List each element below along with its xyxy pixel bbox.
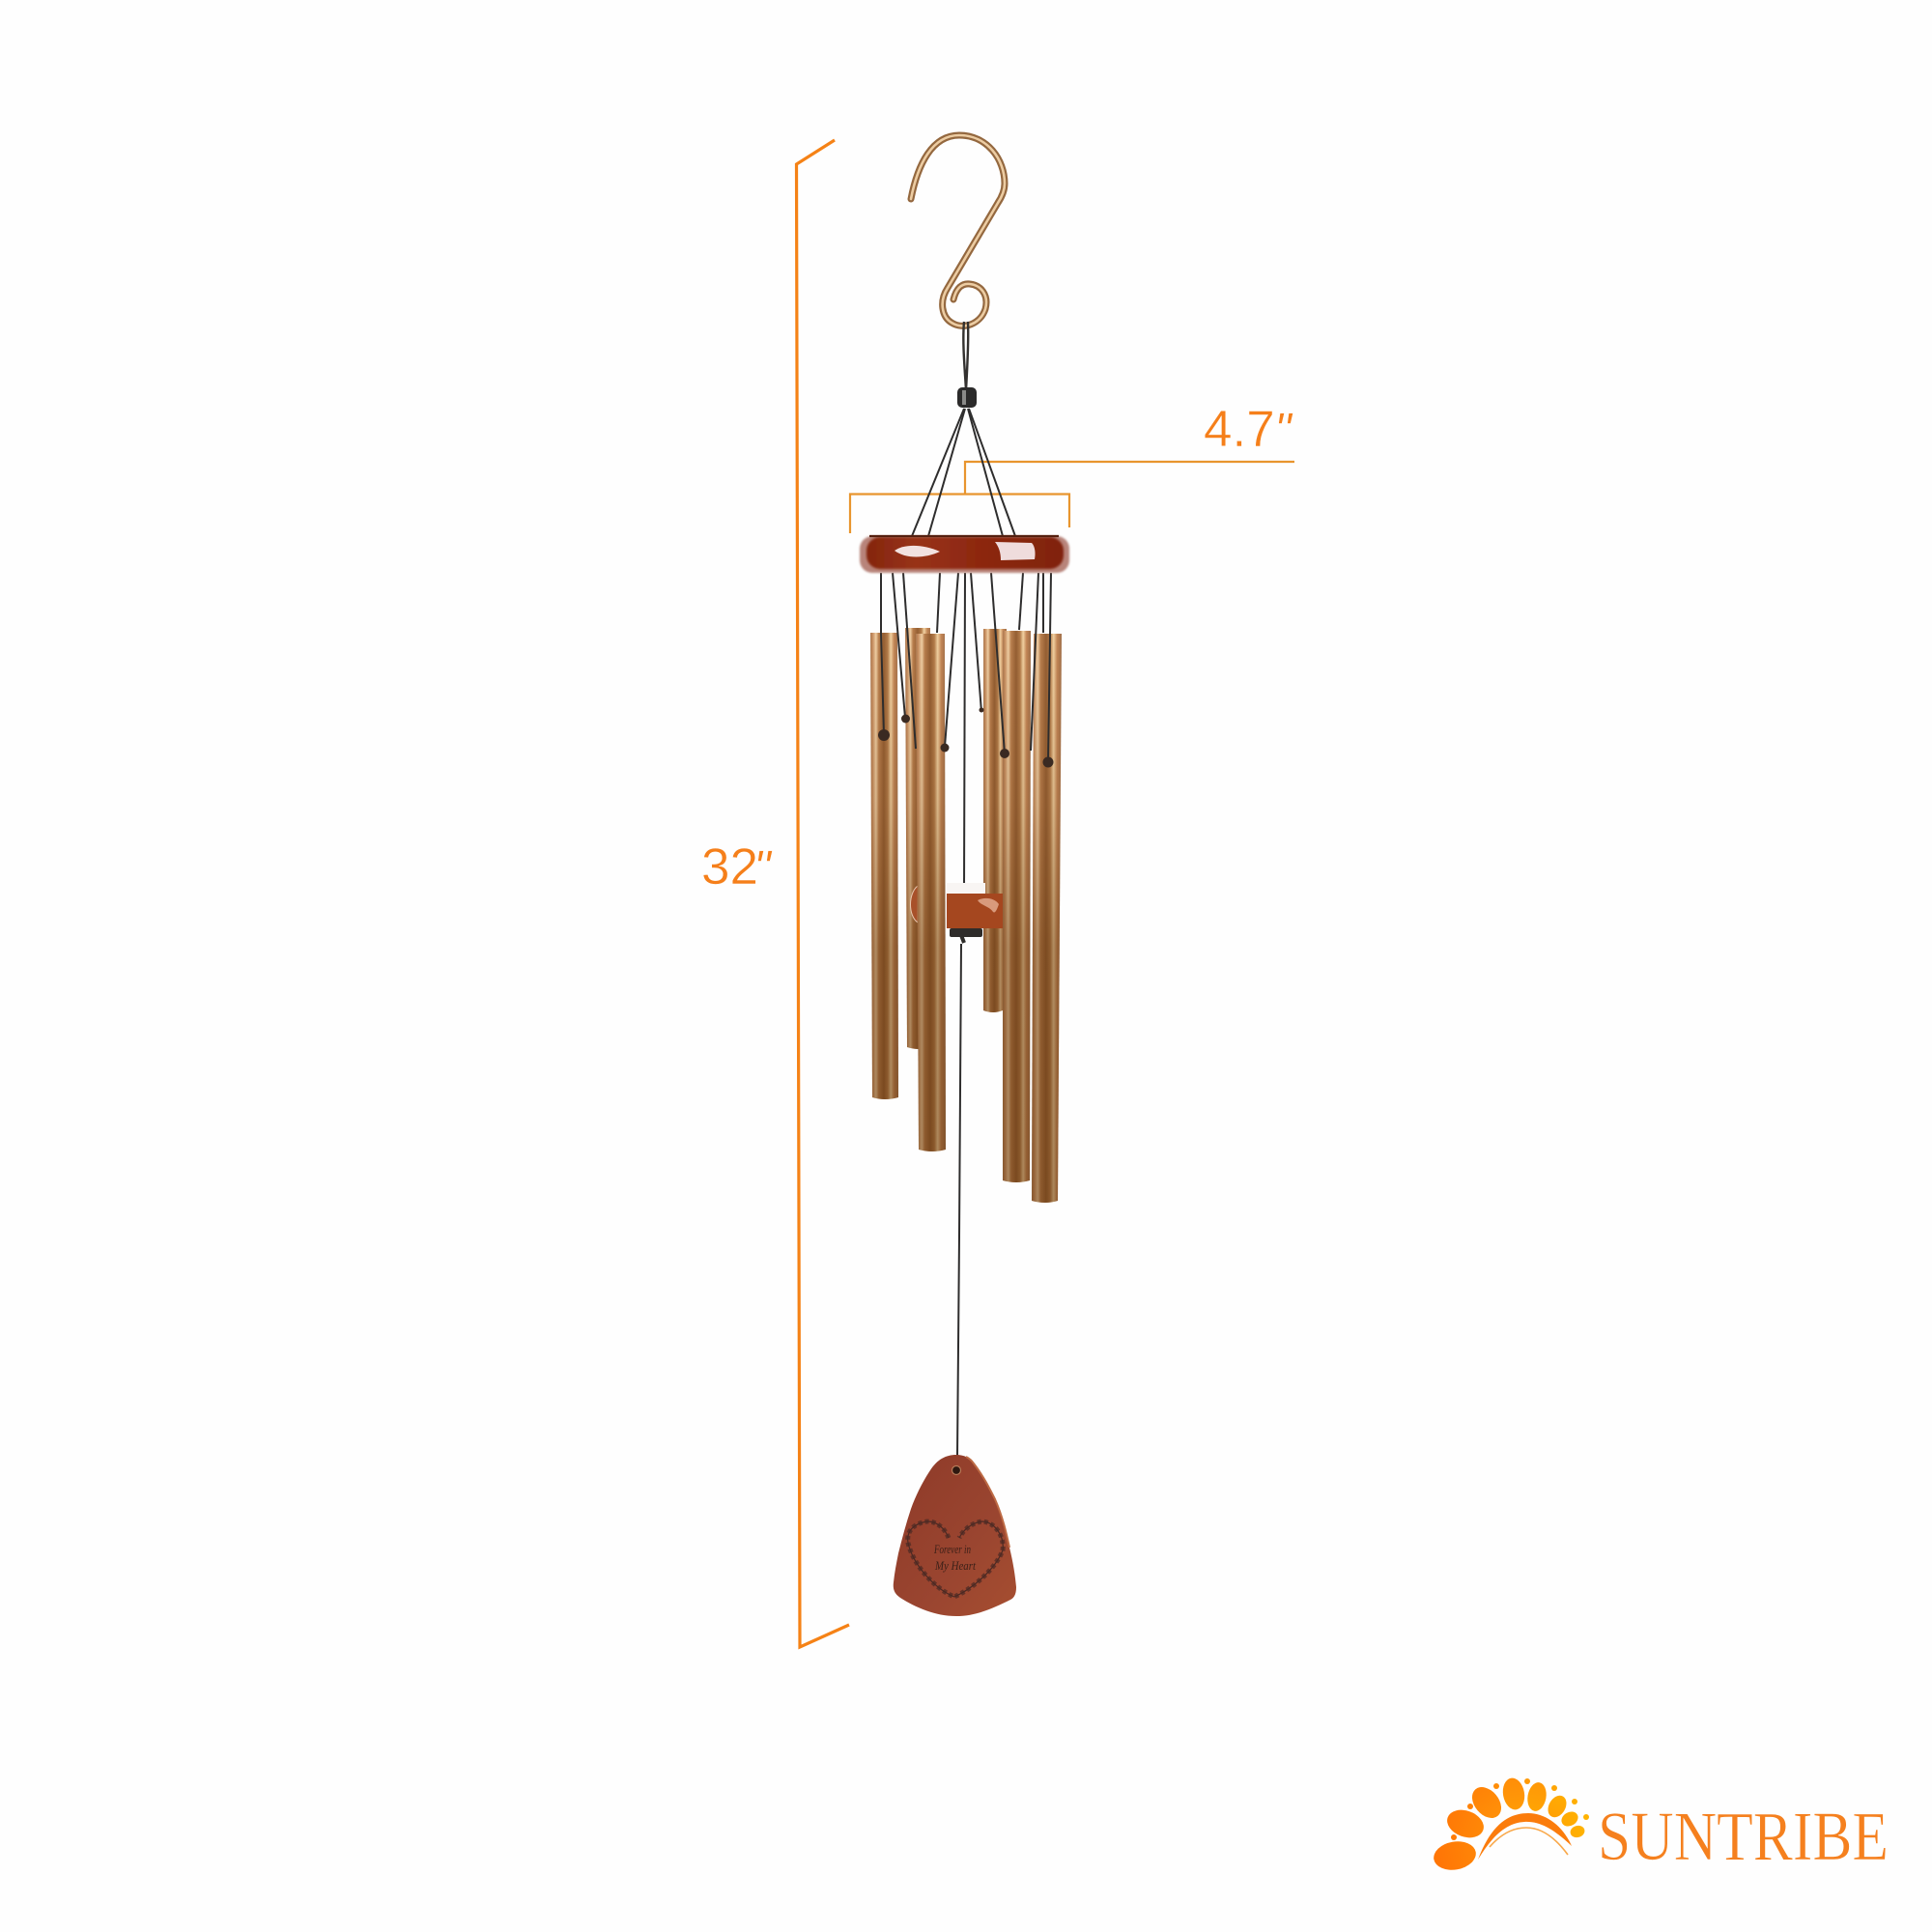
tube strings and knots [878,573,1053,767]
logo wordmark: SUNTRIBE [1598,1798,1889,1875]
hook [911,135,1005,326]
width dimension bracket [850,462,1294,533]
height label: " [753,840,773,895]
lower string [957,944,961,1457]
wooden wind sail [894,1455,1016,1616]
back chime tubes [905,628,1007,1049]
hanging cord and bead [957,322,977,408]
wooden top ring [860,536,1069,573]
front chime tubes [870,631,1062,1203]
height label: 32 [701,838,758,895]
engraved message: Forever in [933,1542,971,1556]
centre string and striker disc [910,573,1004,943]
engraved message [933,1542,976,1573]
heart wreath engraving [908,1521,1003,1597]
width label: 4.7 [1204,401,1275,458]
brand logo [1432,1776,1889,1875]
suspension strings [912,409,1015,536]
logo arc [1478,1813,1572,1860]
logo sun petals [1432,1776,1589,1873]
height dimension bracket [796,140,849,1647]
wind chime [860,135,1069,1616]
engraved message: My Heart [934,1558,976,1573]
width label: " [1274,403,1293,457]
